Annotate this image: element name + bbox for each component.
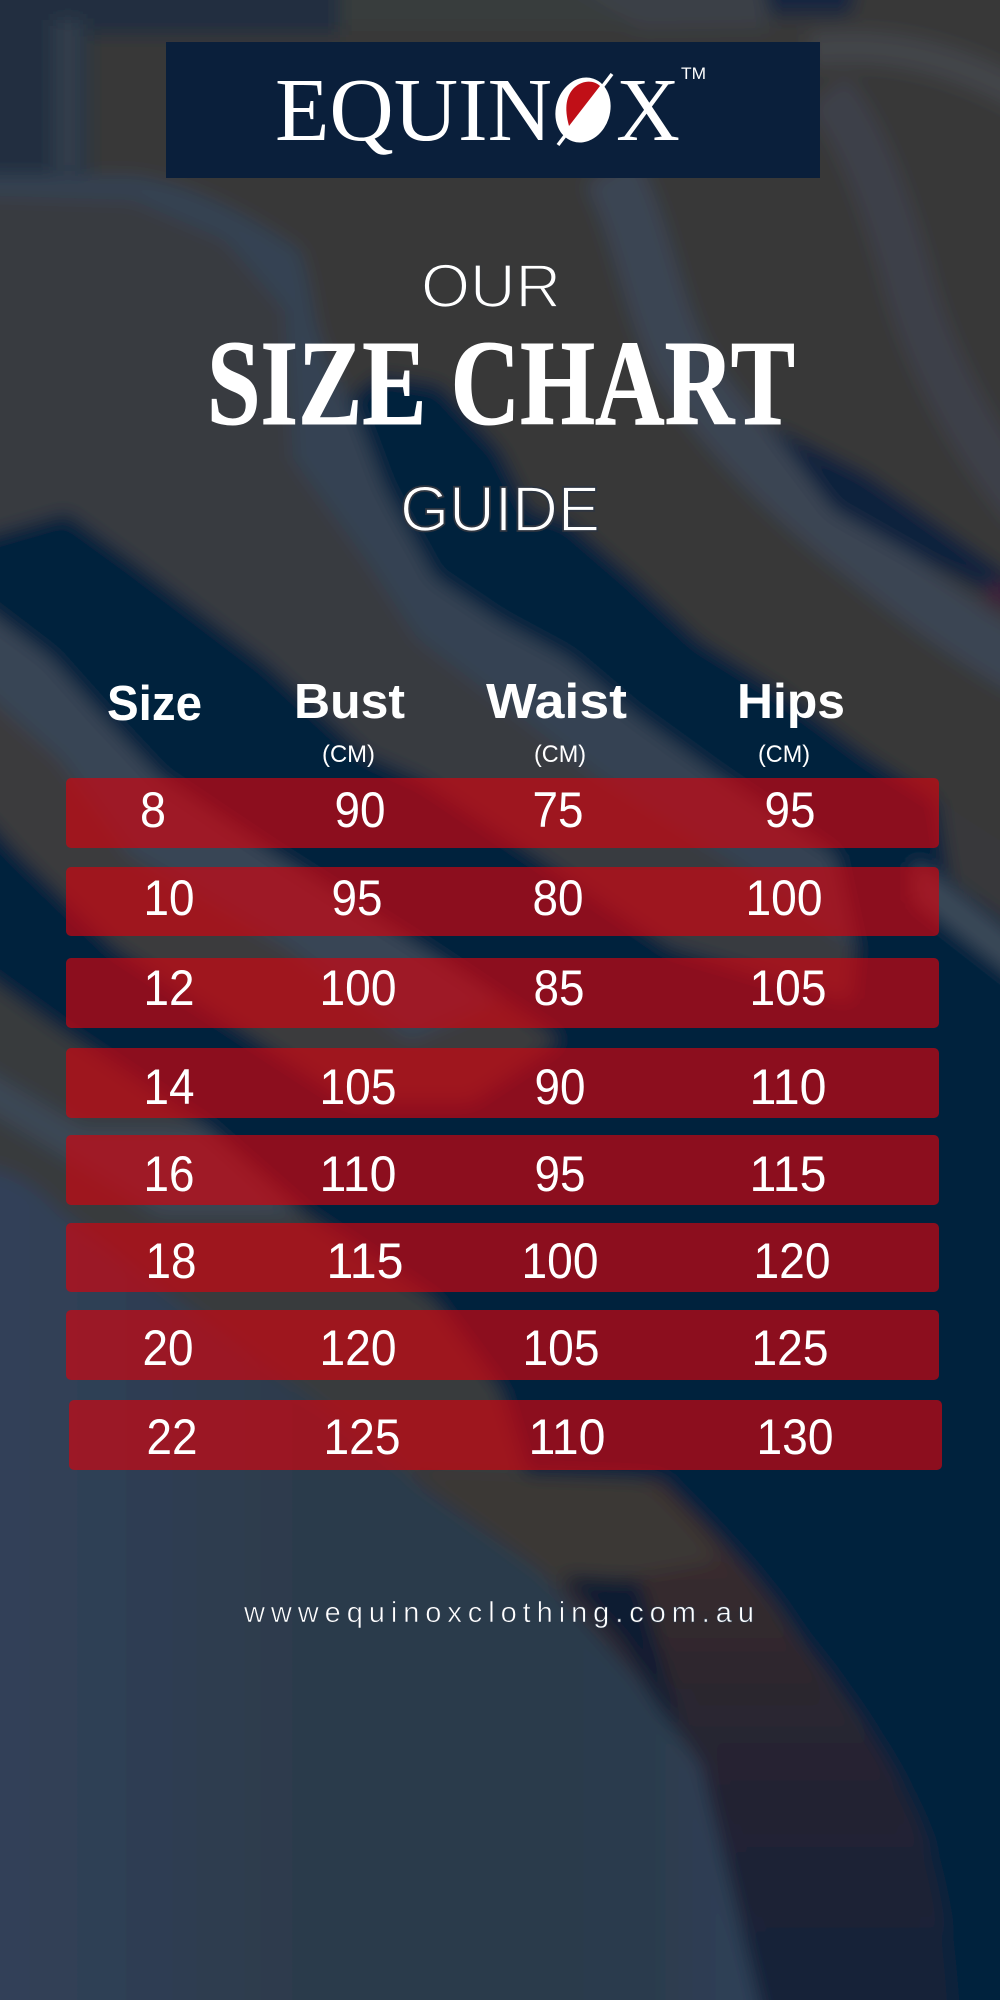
row: size 14: 14 bbox=[144, 1059, 194, 1115]
row: size 20 bbox=[66, 1310, 939, 1380]
row: size 8: 90 bbox=[334, 782, 386, 838]
table header: Waist bbox=[486, 675, 627, 729]
row: size 10: 10 bbox=[144, 870, 194, 926]
row: size 22: 125 bbox=[324, 1409, 400, 1465]
table header: (CM) bbox=[758, 741, 810, 768]
row: size 12 bbox=[66, 958, 939, 1028]
row: size 22 bbox=[69, 1400, 942, 1470]
row: size 10: 100 bbox=[746, 870, 822, 926]
row: size 8 bbox=[66, 778, 939, 848]
row: size 16 bbox=[66, 1135, 939, 1205]
row: size 10 bbox=[66, 867, 939, 936]
table header: Bust bbox=[294, 675, 405, 729]
row: size 10: 95 bbox=[332, 870, 382, 926]
row: size 16: 110 bbox=[320, 1146, 396, 1202]
row: size 14: 110 bbox=[750, 1059, 826, 1115]
table header: Size bbox=[107, 677, 202, 731]
table header: Hips bbox=[737, 675, 845, 729]
navy D bbox=[300, 375, 1000, 1130]
title: SIZE CHART: SIZE CHART bbox=[207, 316, 795, 451]
row: size 16: 95 bbox=[534, 1146, 586, 1202]
title: OUR: OUR bbox=[421, 252, 561, 320]
row: size 22: 22 bbox=[146, 1409, 198, 1465]
row: size 18: 115 bbox=[326, 1233, 404, 1289]
row: size 18: 120 bbox=[754, 1233, 830, 1289]
band C bbox=[0, 965, 530, 1490]
title: GUIDE: GUIDE bbox=[400, 473, 600, 545]
row: size 14: 90 bbox=[534, 1059, 586, 1115]
row: size 18 bbox=[66, 1223, 939, 1292]
hook bbox=[53, 20, 83, 170]
row: size 20: 120 bbox=[320, 1320, 396, 1376]
row: size 20: 125 bbox=[752, 1320, 828, 1376]
row: size 16: 115 bbox=[750, 1146, 826, 1202]
row: size 18: 18 bbox=[146, 1233, 196, 1289]
logo O with slash bbox=[547, 70, 619, 150]
hanger 3 rim bbox=[810, 47, 1000, 100]
table header bbox=[107, 675, 845, 768]
row: size 16: 16 bbox=[144, 1146, 194, 1202]
row: size 14 bbox=[66, 1048, 939, 1118]
row: size 18: 100 bbox=[522, 1233, 598, 1289]
row: size 22: 130 bbox=[756, 1409, 834, 1465]
website URL: wwwequinoxclothing.com.au bbox=[243, 1597, 754, 1629]
navy 2 bbox=[0, 800, 600, 1500]
row: size 8: 95 bbox=[764, 782, 816, 838]
navy band 3 bbox=[767, 423, 1000, 612]
row: size 12: 100 bbox=[320, 960, 396, 1016]
table header: (CM) bbox=[322, 741, 375, 768]
navy wedge 1 bbox=[0, 513, 850, 1040]
logo panel: TM bbox=[681, 64, 706, 83]
hanger 2 rim bbox=[610, 170, 1000, 670]
row: size 20: 105 bbox=[522, 1320, 600, 1376]
band B bbox=[0, 597, 560, 1100]
row: size 12: 105 bbox=[750, 960, 826, 1016]
logo wordmark: EQUIN bbox=[275, 61, 552, 160]
row: size 8: 8 bbox=[140, 782, 166, 838]
brown garment bbox=[410, 1470, 955, 2000]
table rows bbox=[66, 778, 942, 1470]
hanger 1 rim bbox=[0, 175, 855, 947]
row: size 10: 80 bbox=[532, 870, 584, 926]
row: size 8: 75 bbox=[532, 782, 584, 838]
row: size 12: 12 bbox=[144, 960, 194, 1016]
right strip bbox=[915, 860, 1000, 990]
blue garment bbox=[0, 1165, 765, 2000]
table header: (CM) bbox=[534, 741, 586, 768]
logo panel bbox=[166, 42, 820, 178]
row: size 14: 105 bbox=[320, 1059, 396, 1115]
hanger 1 body bbox=[0, 175, 855, 1000]
logo panel: X bbox=[616, 61, 680, 160]
row: size 12: 85 bbox=[534, 960, 584, 1016]
row: size 22: 110 bbox=[528, 1409, 606, 1465]
row: size 20: 20 bbox=[142, 1320, 194, 1376]
